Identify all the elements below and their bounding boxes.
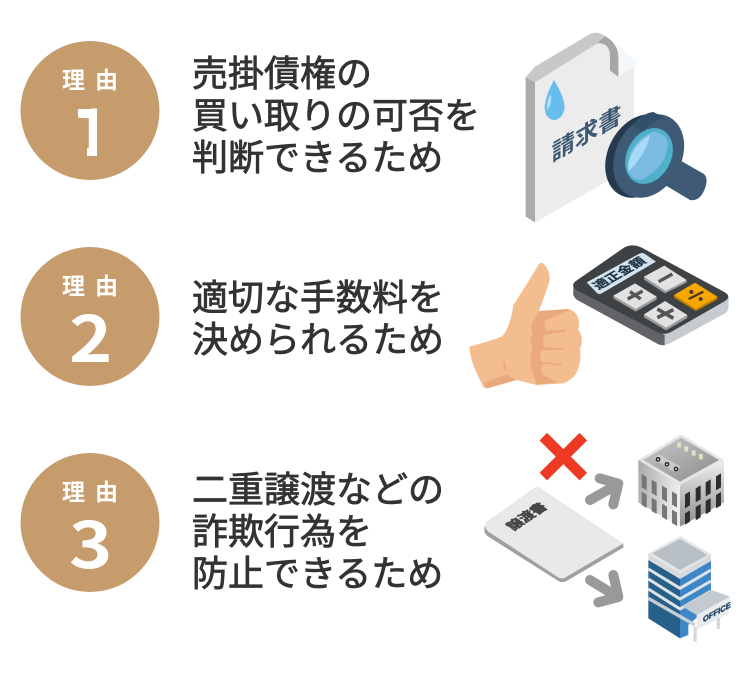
reason 1 text: 買い取りの可否を xyxy=(192,95,480,136)
reason 2 badge: 由 xyxy=(95,273,118,299)
calculator screen: 適正金額 xyxy=(589,254,650,292)
reason 2 text: 決められるため xyxy=(192,319,444,360)
reason 2 badge xyxy=(20,247,160,386)
reason 3 badge: 理 xyxy=(62,479,85,505)
arrow: up right xyxy=(590,478,618,504)
icon: invoice with magnifier xyxy=(526,33,707,222)
document: 譲渡書 xyxy=(503,500,551,533)
reason 2 badge: 理 xyxy=(62,273,85,299)
office building: OFFICE xyxy=(703,599,731,624)
reason 2 text xyxy=(192,277,444,360)
icon: calculator xyxy=(573,245,729,345)
reason 2 text: 適切な手数料を xyxy=(192,277,444,318)
reason 3 badge: 由 xyxy=(95,479,118,505)
key percent xyxy=(674,283,717,311)
arrow: down right xyxy=(590,575,618,602)
icon: thumbs up xyxy=(469,263,582,388)
reason 3 text: 詐欺行為を xyxy=(192,511,372,552)
invoice label: 請求書 xyxy=(552,101,622,168)
office building xyxy=(648,536,731,642)
reason 1 text xyxy=(192,53,480,178)
key minus xyxy=(644,266,687,293)
icon: water drop xyxy=(545,80,565,120)
reason 1 text: 判断できるため xyxy=(192,137,443,178)
reason 3 text xyxy=(192,469,444,594)
reason 2 badge: 2 xyxy=(69,288,112,381)
document xyxy=(484,487,623,582)
reason 3 text: 防止できるため xyxy=(192,553,443,594)
reason 1 badge xyxy=(20,41,160,180)
key times xyxy=(644,301,687,330)
reason 3 text: 二重譲渡などの xyxy=(192,469,444,510)
reason 1 text: 売掛債権の xyxy=(192,53,372,94)
reason 1 badge: 1 xyxy=(71,82,114,175)
icon: red cross xyxy=(543,437,583,477)
reason 3 badge: 3 xyxy=(69,494,112,587)
key plus xyxy=(613,283,657,312)
diagram: transfer to two companies xyxy=(484,434,731,642)
reason 1 badge: 理 xyxy=(62,67,85,93)
magnifier xyxy=(591,102,707,210)
reason 1 badge: 由 xyxy=(95,67,118,93)
reason 3 badge xyxy=(20,453,160,592)
grey building xyxy=(638,434,724,527)
